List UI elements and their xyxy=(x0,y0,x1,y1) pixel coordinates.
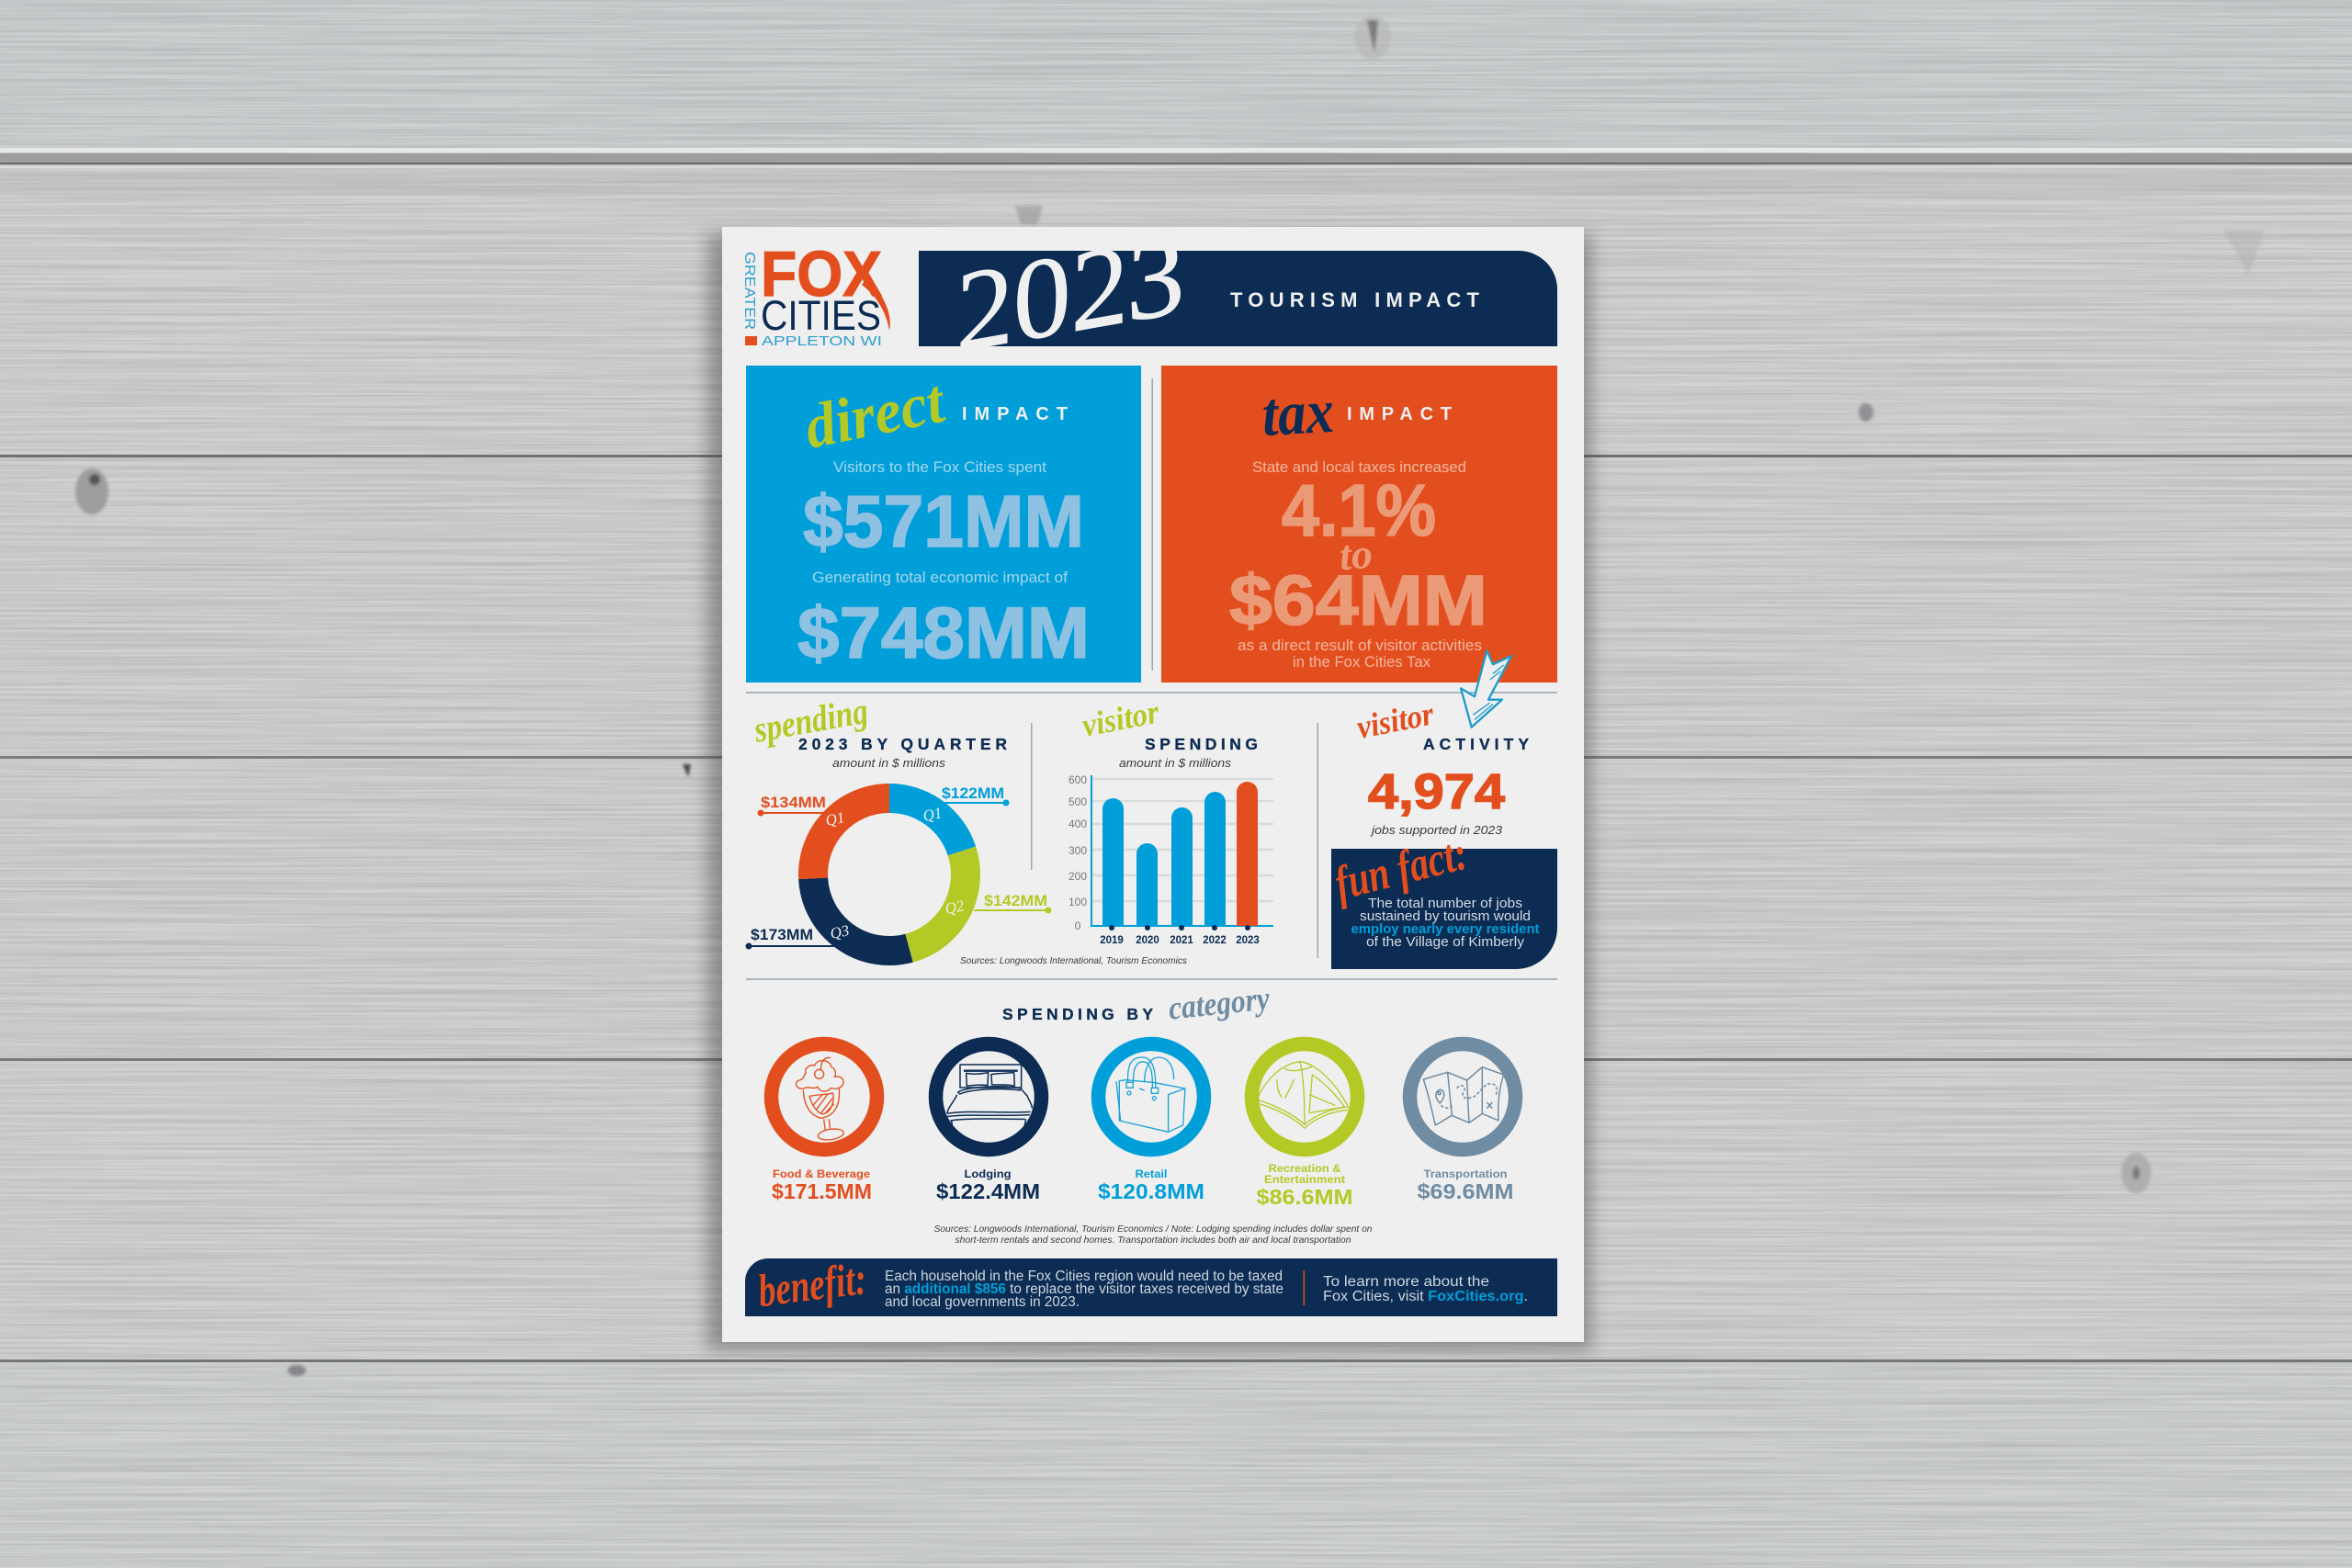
script: spending: spending xyxy=(750,690,871,750)
arrow: hand-drawn pointing down xyxy=(1461,650,1511,728)
section: spending by quarter xyxy=(746,690,1051,951)
logo: Greater Fox Cities Appleton WI: APPLETON WI xyxy=(762,334,882,349)
bar chart: 600 xyxy=(1069,773,1087,786)
value: 86.6MM: $86.6MM xyxy=(1257,1185,1352,1209)
heading: 2023 by quarter: 2023 BY QUARTER xyxy=(798,735,1007,753)
text: fun fact body: The total number of jobs xyxy=(1368,896,1522,911)
bar chart xyxy=(1069,773,1273,946)
panel: direct impact xyxy=(746,366,1141,682)
text: benefit body xyxy=(885,1269,1283,1310)
note: amount in millions: amount in $ millions xyxy=(832,757,945,770)
callout: 134MM xyxy=(757,794,827,816)
category: food and beverage xyxy=(772,1043,876,1203)
panel: benefit xyxy=(745,1252,1557,1316)
script: visitor: visitor xyxy=(1354,694,1438,746)
bar chart: 0 xyxy=(1075,919,1081,932)
category: lodging xyxy=(935,1043,1042,1203)
icon: bed xyxy=(947,1065,1032,1129)
heading: activity: ACTIVITY xyxy=(1423,735,1529,753)
bar chart: 2023 xyxy=(1236,935,1260,946)
icon: tent xyxy=(1259,1062,1349,1128)
note: amount in millions: amount in $ millions xyxy=(1119,757,1231,770)
heading: impact: IMPACT xyxy=(1347,404,1452,424)
text: learn more xyxy=(1323,1274,1528,1304)
donut quarter labels: Q2 xyxy=(944,897,966,918)
label: retail: Retail xyxy=(1136,1168,1167,1180)
note: sources and lodging note: Sources: Longwoods International, Tourism Economics / Note: Lodging spending includes dollar spent on xyxy=(933,1224,1373,1235)
bar chart: 400 xyxy=(1069,818,1087,830)
header bar xyxy=(919,251,1557,346)
text: benefit body: an additional $856 to replace the visitor taxes received by state xyxy=(885,1281,1283,1297)
donut quarter labels: Q1 xyxy=(922,804,944,825)
logo: Greater Fox Cities Appleton WI xyxy=(741,238,890,349)
category: retail xyxy=(1098,1043,1204,1203)
text: fun fact body: employ nearly every resident xyxy=(1351,921,1540,937)
section: visitor activity xyxy=(1329,694,1557,969)
callout: 122MM: $122MM xyxy=(942,784,1004,802)
stat: 64MM: $64MM xyxy=(1229,561,1487,640)
category: recreation and entertainment xyxy=(1251,1043,1358,1209)
text: learn more: Fox Cities, visit FoxCities.org . xyxy=(1323,1289,1528,1304)
callout: 173MM xyxy=(746,926,834,950)
text: fun fact body: sustained by tourism would xyxy=(1360,908,1531,924)
note: sources and lodging note xyxy=(933,1224,1373,1246)
text: visitors spent: Visitors to the Fox Cities spent xyxy=(833,458,1046,476)
category: transportation xyxy=(1409,1043,1516,1203)
heading: tax: tax xyxy=(1261,376,1336,449)
logo: Greater Fox Cities Appleton WI: CITIES xyxy=(761,292,881,339)
label: transportation: Transportation xyxy=(1424,1168,1507,1180)
text: generating: Generating total economic impact of xyxy=(812,569,1068,586)
heading: spending: SPENDING xyxy=(1145,735,1258,753)
value: 120.8MM: $120.8MM xyxy=(1098,1179,1204,1203)
note: sources: Sources: Longwoods International, Tourism Economics xyxy=(960,955,1188,966)
logo: Greater Fox Cities Appleton WI: GREATER xyxy=(741,252,757,330)
bar chart: 2021 xyxy=(1170,935,1193,946)
note: sources and lodging note: short-term rentals and second homes. Transportation includes both air and local transportation xyxy=(956,1235,1351,1246)
callout: 142MM xyxy=(974,892,1051,913)
value: 171.5MM: $171.5MM xyxy=(772,1179,872,1203)
title: 2023: 2023 xyxy=(944,211,1195,376)
stat: 4.1 percent: 4.1% xyxy=(1282,469,1436,551)
bar chart: 2019 xyxy=(1100,935,1124,946)
bar chart: 100 xyxy=(1069,896,1087,908)
label: recreation and entertainment: Entertainment xyxy=(1264,1174,1345,1186)
text: direct result: as a direct result of visitor activities xyxy=(1238,637,1482,654)
icon: map xyxy=(1423,1067,1504,1125)
donut chart xyxy=(813,798,966,951)
script: benefit: benefit: xyxy=(755,1252,869,1316)
icon: sundae xyxy=(796,1057,844,1142)
bar chart: 2020 xyxy=(1136,935,1159,946)
heading: impact: IMPACT xyxy=(962,404,1068,424)
label: recreation and entertainment xyxy=(1264,1163,1345,1186)
panel: tax impact xyxy=(1161,366,1557,682)
poster: 2023 tourism impact sheet xyxy=(722,211,1584,1342)
section: visitor spending xyxy=(960,693,1273,966)
label: food and beverage: Food & Beverage xyxy=(773,1168,871,1180)
stat: 571MM: $571MM xyxy=(803,480,1084,562)
text: learn more: To learn more about the xyxy=(1323,1274,1489,1290)
bar chart: 200 xyxy=(1069,870,1087,883)
text: benefit body: and local governments in 2023. xyxy=(885,1294,1080,1310)
donut quarter labels: Q3 xyxy=(829,921,851,942)
text: in the fox cities tax: in the Fox Cities Tax xyxy=(1293,653,1430,671)
stat: 4,974: 4,974 xyxy=(1368,764,1505,819)
panel: fun fact xyxy=(1329,828,1557,969)
bar chart: 2022 xyxy=(1203,935,1227,946)
logo: Greater Fox Cities Appleton WI: FOX xyxy=(761,238,882,310)
section: spending by category xyxy=(772,979,1516,1246)
heading: spending by: SPENDING BY xyxy=(1002,1005,1153,1023)
label: lodging: Lodging xyxy=(965,1168,1011,1180)
poster shadow xyxy=(707,233,1591,1350)
callout: 134MM: $134MM xyxy=(761,794,826,811)
heading: direct: direct xyxy=(798,366,951,462)
stat: 748MM: $748MM xyxy=(797,592,1090,673)
icon: handbag xyxy=(1116,1057,1185,1132)
script: category: category xyxy=(1167,979,1272,1027)
text: fun fact body xyxy=(1351,896,1540,950)
label: recreation and entertainment: Recreation & xyxy=(1268,1163,1341,1175)
script: visitor: visitor xyxy=(1080,693,1163,744)
value: 122.4MM: $122.4MM xyxy=(936,1179,1040,1203)
value: 69.6MM: $69.6MM xyxy=(1417,1179,1514,1203)
script: to: to xyxy=(1337,530,1374,580)
callout: 142MM: $142MM xyxy=(984,892,1047,909)
donut quarter labels xyxy=(824,804,966,942)
script: fun fact: fun fact: xyxy=(1329,828,1473,910)
callout: 173MM: $173MM xyxy=(751,926,813,943)
text: benefit body: Each household in the Fox Cities region would need to be taxed xyxy=(885,1269,1283,1284)
bar chart: 300 xyxy=(1069,844,1087,857)
text: fun fact body: of the Village of Kimberly xyxy=(1366,934,1525,950)
text: state and local taxes: State and local taxes increased xyxy=(1252,458,1466,476)
title: tourism impact: TOURISM IMPACT xyxy=(1230,288,1480,311)
donut quarter labels: Q1 xyxy=(824,808,846,829)
bar chart: 500 xyxy=(1069,795,1087,808)
note: jobs supported: jobs supported in 2023 xyxy=(1370,824,1502,837)
